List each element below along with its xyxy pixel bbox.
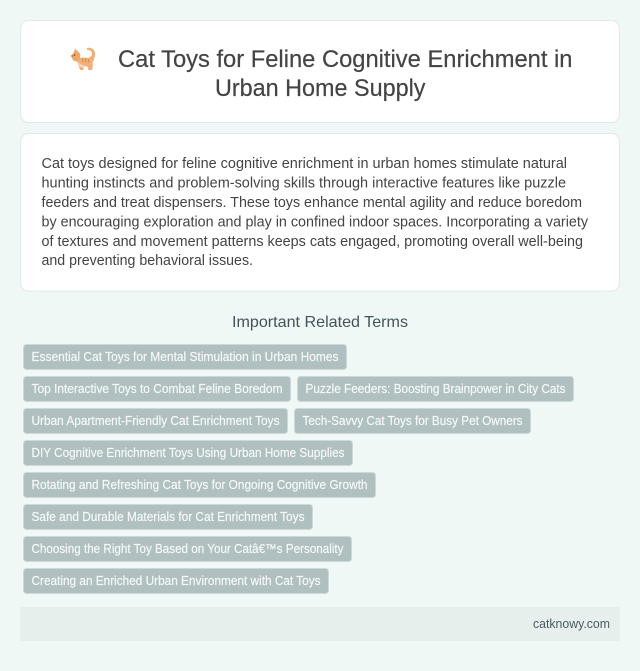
tag <box>24 344 346 370</box>
icon: cat <box>71 48 95 70</box>
tag <box>24 376 290 402</box>
panel: related term tags <box>24 344 574 594</box>
tag: Essential Cat Toys for Mental Stimulation in Urban Homes <box>32 350 338 364</box>
title text <box>118 46 572 102</box>
tag <box>24 568 328 594</box>
heading: important related terms: Important Related Terms <box>232 314 408 331</box>
footer source text: catknowy.com <box>533 616 610 631</box>
tag: Safe and Durable Materials for Cat Enrichment Toys <box>32 510 304 524</box>
description text: hunting instincts and problem-solving skills through interactive features like puzzle <box>42 176 566 192</box>
panel: description <box>20 134 620 291</box>
tag: Puzzle Feeders: Boosting Brainpower in City Cats <box>306 382 566 396</box>
tag: Rotating and Refreshing Cat Toys for Ongoing Cognitive Growth <box>32 478 368 492</box>
tag: Urban Apartment-Friendly Cat Enrichment Toys <box>32 414 280 428</box>
tag <box>24 504 312 530</box>
tag <box>24 472 376 498</box>
title text: Urban Home Supply <box>215 75 426 102</box>
description text: of textures and movement patterns keeps cats engaged, promoting overall well-being <box>42 234 583 250</box>
description text: Cat toys designed for feline cognitive enrichment in urban homes stimulate natural <box>42 156 567 172</box>
tag <box>24 408 288 434</box>
tag: Creating an Enriched Urban Environment with Cat Toys <box>32 574 320 588</box>
tag <box>24 536 352 562</box>
title text: Cat Toys for Feline Cognitive Enrichment in <box>118 46 572 73</box>
tag: Tech-Savvy Cat Toys for Busy Pet Owners <box>302 414 522 428</box>
panel: title card <box>20 20 620 122</box>
tag <box>298 376 574 402</box>
footer bar <box>20 607 620 641</box>
description text: and preventing behavioral issues. <box>42 253 253 269</box>
description text <box>42 156 589 269</box>
description text: by encouraging exploration and play in confined indoor spaces. Incorporating a variety <box>42 214 589 230</box>
description text: feeders and treat dispensers. These toys enhance mental agility and reduce boredom <box>42 195 582 211</box>
tag: Top Interactive Toys to Combat Feline Boredom <box>32 382 282 396</box>
tag: Choosing the Right Toy Based on Your Catâ€™s Personality <box>32 542 344 556</box>
tag <box>24 440 352 466</box>
tag <box>294 408 530 434</box>
tag: DIY Cognitive Enrichment Toys Using Urban Home Supplies <box>32 446 344 460</box>
